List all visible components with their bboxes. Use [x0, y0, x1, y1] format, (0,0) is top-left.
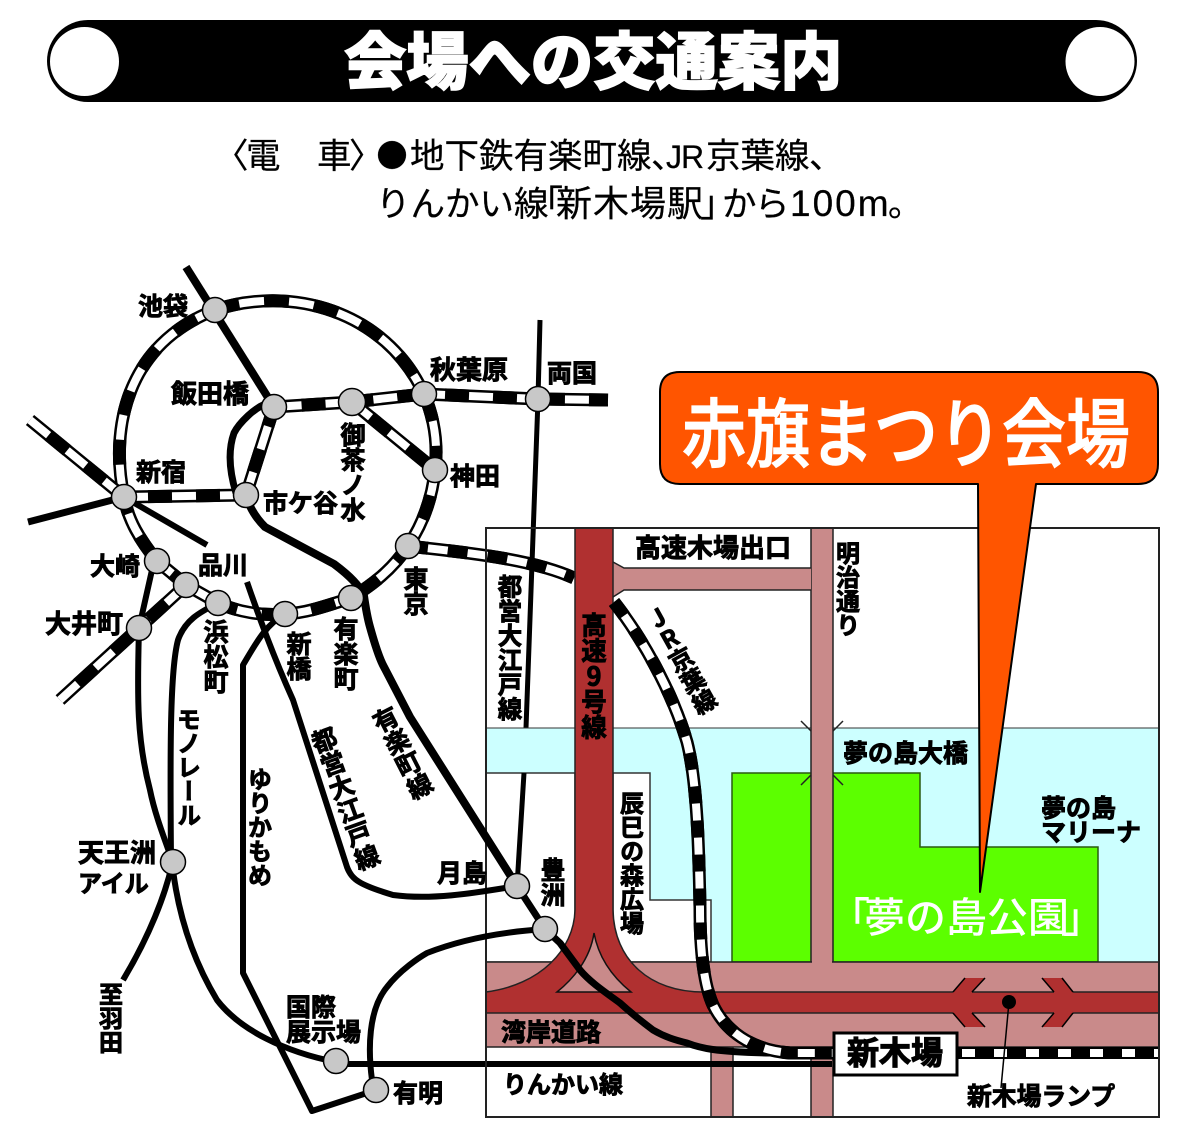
water	[486, 728, 1159, 962]
station and line labels: 天王洲	[78, 833, 156, 870]
station and line labels: 池袋	[138, 287, 188, 323]
line to Kokusai Tenjijo	[173, 870, 336, 1062]
expressway route 9	[486, 528, 1159, 1013]
station and line labels: 国際	[286, 988, 336, 1024]
road gap for Meiji-dori junction	[812, 958, 832, 966]
access directions text: 地下鉄有楽町線	[410, 138, 652, 176]
access directions text: りんかい線	[376, 186, 548, 224]
title banner	[47, 12, 1137, 102]
station and line labels: 豊洲	[535, 857, 571, 907]
expressway junction triangle	[557, 933, 631, 992]
JR Keiyo line east of Shin-Kiba	[957, 1047, 1159, 1059]
access directions text: 。	[888, 186, 922, 224]
station and line labels: 浜松町	[198, 619, 234, 694]
icon: left banner circle	[50, 27, 119, 96]
station and line labels: 夢の島	[1041, 789, 1116, 825]
leader line: Shin-Kiba ramp	[1001, 1002, 1009, 1088]
land: Tatsumi no Mori plaza	[486, 773, 711, 962]
station and line labels: 湾岸道路	[501, 1013, 601, 1049]
access directions text	[214, 138, 922, 224]
venue callout	[660, 372, 1158, 892]
station and line labels: 至羽田	[94, 982, 128, 1054]
Toei Oedo line west	[247, 582, 517, 897]
station and line labels: 都営大江戸線	[303, 722, 388, 875]
station and line labels: 大崎	[90, 547, 140, 583]
map border	[486, 528, 1159, 1117]
road: south branch	[711, 1047, 733, 1117]
Yurikamome east loop	[370, 929, 545, 1080]
road: Kiba exit	[613, 562, 811, 597]
station and line labels: JR京葉線	[637, 599, 726, 721]
station and line labels: 東京	[398, 566, 434, 616]
station and line labels: 明治通り	[830, 541, 866, 637]
station and line labels: 飯田橋	[171, 374, 249, 411]
station and line labels: 展示場	[286, 1013, 361, 1049]
station and line labels: 大井町	[45, 604, 123, 641]
Toei Oedo line to Tsukishima	[517, 773, 524, 886]
station and line labels: 品川	[198, 546, 248, 582]
Shin-Kiba station box	[834, 1033, 957, 1075]
access directions text: 〈電車〉	[214, 138, 384, 176]
station and line labels: 辰巳の森広場	[614, 791, 650, 936]
callout text: 赤旗まつり会場	[682, 375, 1130, 484]
access directions text: 、	[651, 138, 686, 176]
access directions text: 100m	[790, 183, 891, 224]
station and line labels	[45, 287, 1141, 1113]
Yurakucho line to Shin-Kiba	[517, 886, 770, 1053]
station and line labels: 夢の島大橋	[843, 734, 968, 770]
line to Haneda	[123, 865, 172, 980]
Shin-Kiba ramp west chevron	[953, 978, 985, 1027]
access directions text: 、	[809, 138, 844, 176]
access directions text: か	[722, 186, 756, 224]
bridge marks	[613, 562, 843, 785]
station and line labels: ゆりかもめ	[242, 767, 278, 887]
Shin-Kiba ramp east chevron	[1042, 978, 1073, 1027]
station and line labels: りんかい線	[503, 1065, 623, 1100]
title text: 会場への交通案内	[344, 12, 842, 102]
JR Keiyo line	[614, 602, 834, 1053]
station and line labels: 高速9号線	[576, 612, 612, 740]
station and line labels: 有明	[393, 1074, 443, 1110]
access directions text: 「新木場駅」	[527, 183, 736, 224]
station and line labels: 都営大江戸線	[492, 574, 528, 721]
road: Meiji-dori	[811, 528, 833, 1117]
Yumenoshima park	[732, 773, 1098, 962]
station and line labels: 新宿	[136, 453, 186, 489]
Yamanote ring line	[119, 301, 436, 615]
station and line labels: 月島	[437, 854, 487, 890]
Yurakucho line	[246, 495, 517, 886]
area map panel	[336, 320, 1159, 1117]
station and line labels: 新橋	[281, 631, 317, 681]
station markers	[112, 298, 558, 1102]
Monorail A	[138, 570, 172, 860]
station and line labels: 市ケ谷	[263, 484, 338, 520]
Tokyo station to Shin-Kiba JR stripe, north stub	[408, 546, 574, 578]
subway and monorail lines	[28, 267, 545, 1111]
Rinkai line	[336, 1061, 832, 1067]
Monorail B	[171, 603, 218, 860]
station and line labels: モノレール	[172, 707, 206, 827]
station and line labels: マリーナ	[1041, 813, 1141, 849]
station and line labels: 有楽町	[328, 616, 364, 691]
ramp dot	[1002, 995, 1016, 1009]
Yurikamome line	[243, 614, 376, 1111]
station and line labels: 有楽町線	[364, 700, 441, 805]
station and line labels: 新木場ランプ	[967, 1077, 1115, 1113]
station and line labels: 新木場	[847, 1028, 943, 1074]
station and line labels: 神田	[450, 457, 500, 493]
station and line labels: 秋葉原	[430, 350, 508, 387]
park name: 「夢の島公園」	[829, 884, 1104, 944]
station and line labels: アイル	[78, 864, 149, 899]
access directions text: ら	[755, 186, 790, 224]
access directions text: JR	[666, 139, 703, 175]
icon: bullet	[378, 141, 406, 169]
striped commuter lines	[30, 394, 608, 700]
station and line labels: 両国	[547, 354, 597, 390]
station and line labels: 御茶ノ水	[335, 422, 371, 522]
Toei Oedo line inside map (north part)	[526, 320, 540, 728]
access directions text: 京葉線	[706, 138, 810, 176]
road: Wangan road	[486, 962, 1159, 1047]
station and line labels: 高速木場出口	[635, 528, 791, 565]
icon: right banner circle	[1066, 27, 1134, 96]
